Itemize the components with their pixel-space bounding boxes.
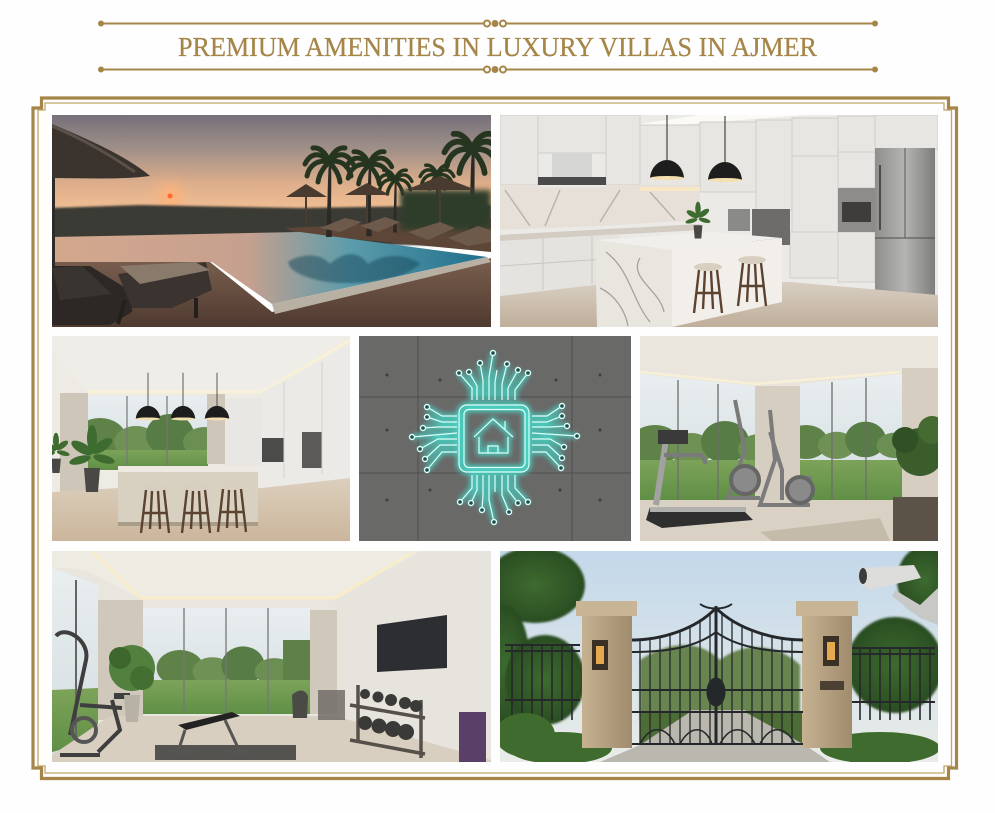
hedges [495,713,940,764]
pendants [136,373,229,420]
ceiling [640,336,938,384]
yoga mat roll [459,712,486,762]
counter and base cabinets [500,224,700,296]
panel: open living kitchen [52,336,350,541]
tall side cabinets [790,232,875,282]
island plant [685,202,711,238]
header ornament: bottom rule [99,66,877,72]
ceiling [52,551,420,598]
concrete wall panels [359,336,631,541]
workout bench on mat [155,712,296,760]
header ornament: top rule [99,20,877,26]
side fences [505,645,935,720]
deck [52,258,491,327]
marble backsplash [500,185,700,230]
exercise bike [56,632,130,755]
left window [52,568,98,755]
potted plant [109,645,155,722]
elliptical machines [728,400,813,505]
wall TV [377,615,447,672]
wall cabinets [225,345,350,490]
floor [500,282,938,327]
distant landscape [52,205,491,245]
marble island [595,232,782,327]
upper cabinets [500,115,938,232]
trees [480,546,953,725]
sofa [893,497,938,541]
poolside parasols [286,176,476,225]
floor vase [292,691,308,718]
pool water [52,232,487,304]
panel: strength gym [52,551,491,762]
sun [158,184,182,208]
floor [640,500,938,541]
island [118,466,258,526]
panel: infinity pool at sunset [52,115,491,327]
central window [143,608,310,714]
neon circuit [410,350,580,524]
curtains [60,393,225,493]
plant [42,425,116,492]
iron gate [632,604,803,744]
floor [52,716,491,762]
built-in ovens [728,188,875,245]
fridge [875,148,935,295]
windows [74,396,227,470]
security camera [859,565,938,625]
driveway [600,710,830,762]
ceiling [52,336,350,392]
title: PREMIUM AMENITIES IN LUXURY VILLAS IN AJMER [178,32,817,62]
stools [141,482,246,533]
potted plant [892,416,946,476]
ceiling light strip [640,115,805,128]
dumbbell racks [318,685,425,758]
sun loungers on far deck [320,217,491,246]
panel: neon smart home chip [359,336,631,541]
floor [52,478,350,541]
foreground loungers [52,262,212,325]
windows and lawn [629,374,914,500]
side wall [335,551,491,762]
treadmill [646,430,753,528]
gold frame [33,98,956,778]
rug [760,518,890,541]
panel: white marble kitchen [500,115,938,327]
palm trees [305,134,500,237]
panel: gated entrance [500,551,938,762]
bar stools [694,256,766,313]
thatched umbrella [52,124,150,268]
pendant lights [650,114,742,182]
curtains [98,600,337,720]
curtains [755,368,938,500]
panel: cardio gym [640,336,938,541]
stone pillars [576,601,858,748]
range hood [538,153,606,185]
